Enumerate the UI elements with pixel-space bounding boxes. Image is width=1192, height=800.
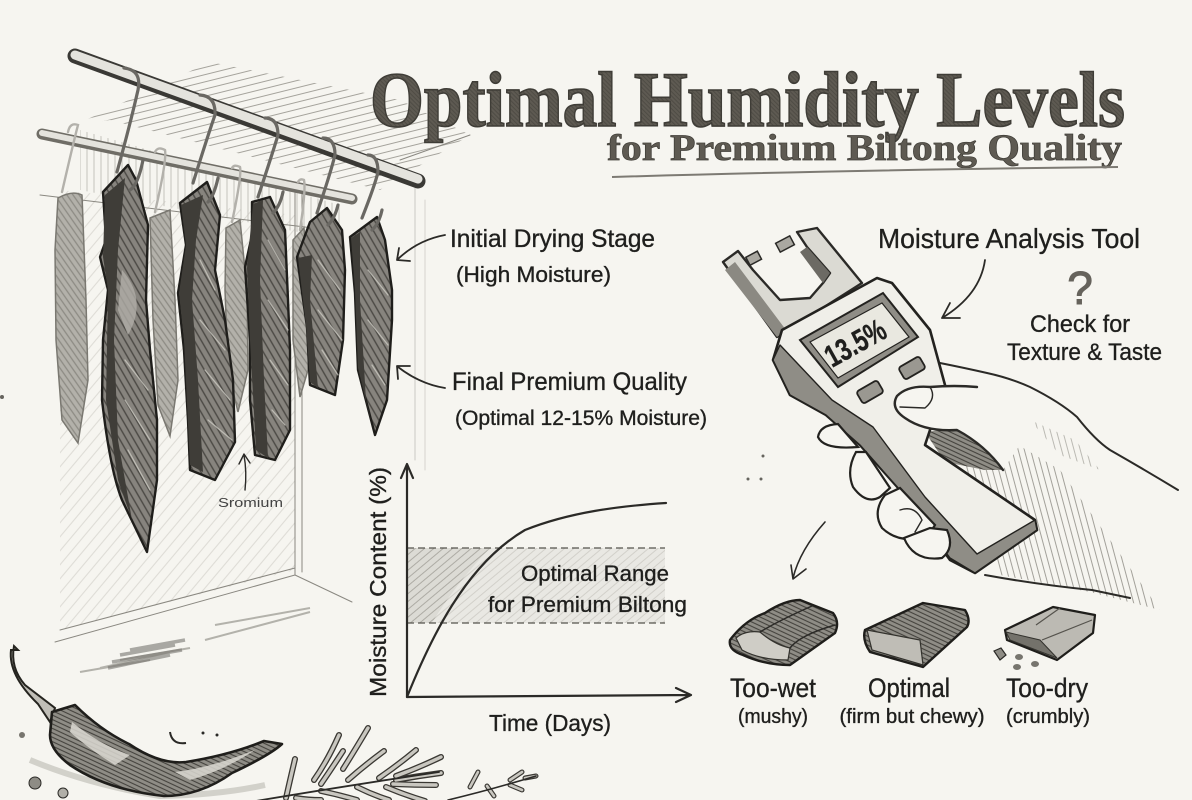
label: initial drying stage [450, 225, 655, 287]
ring fingernail [900, 509, 922, 532]
back rod [42, 133, 352, 199]
chart: moisture content over time [365, 464, 691, 736]
hand outline [940, 363, 1178, 490]
label: initial drying stage: Initial Drying Stage [450, 225, 655, 253]
sample: too wet [730, 600, 837, 728]
label: final premium quality: Final Premium Quality [452, 368, 687, 396]
arrow: to initial drying strip [397, 235, 445, 261]
reading: 13.5% [818, 312, 892, 374]
sample: optimal: (firm but chewy) [840, 706, 984, 728]
label: sromium: Sromium [218, 495, 283, 510]
optimal band [407, 548, 490, 623]
hanging biltong strips with hooks [100, 68, 392, 552]
label: moisture analysis tool: Moisture Analysis Tool [878, 223, 1140, 254]
label: check for texture and taste [1007, 311, 1162, 366]
chili pepper [11, 646, 282, 798]
back rod and background hanging strips [42, 124, 352, 443]
little finger [904, 528, 950, 559]
screen [800, 293, 918, 387]
background strip 3 [225, 166, 248, 412]
x axis label: Time (Days) [489, 710, 611, 736]
sample: too dry: (crumbly) [1006, 706, 1090, 728]
subtitle: for Premium Biltong Quality [607, 128, 1123, 169]
band label: for Premium Biltong [488, 592, 687, 617]
meter buttons [856, 356, 926, 404]
biltong strip 2 [178, 95, 235, 480]
band label: Optimal Range [521, 561, 669, 586]
biltong strip 1 [100, 68, 157, 552]
meter side band [773, 345, 1037, 573]
meter body [773, 278, 1037, 573]
ring finger [878, 488, 935, 539]
label: initial drying stage: (High Moisture) [456, 262, 611, 287]
biltong strip 5 [350, 155, 392, 435]
thumb [895, 384, 1040, 470]
rosemary sprig [250, 728, 441, 800]
background strip 4 [293, 179, 310, 397]
axes [401, 464, 691, 702]
biltong strip 3 [245, 118, 290, 460]
paper specks [0, 395, 764, 480]
room background sketch [40, 62, 470, 672]
background strip 2 [150, 148, 178, 436]
y axis label: Moisture Content (%) [365, 467, 391, 697]
sample: too wet: Too-wet [730, 673, 816, 703]
arrow: to sromium [239, 454, 250, 490]
hand shading [960, 440, 1160, 610]
front rod [75, 55, 418, 181]
moisture analysis tool in hand [723, 228, 1178, 610]
label: check for texture and taste: Texture & Taste [1007, 339, 1162, 366]
question mark: ? [1067, 262, 1093, 314]
sensor pins [746, 236, 794, 265]
middle finger [850, 452, 890, 499]
sample: too dry: Too-dry [1006, 673, 1088, 703]
biltong strip 4 [297, 138, 345, 395]
clamp jaws [723, 228, 862, 337]
label: check for texture and taste: Check for [1030, 311, 1130, 338]
index finger [818, 424, 858, 448]
sample: too dry [994, 607, 1095, 728]
fingers [818, 424, 950, 559]
sample: optimal [840, 603, 984, 728]
small herb sprig [448, 772, 536, 800]
moisture curve [407, 503, 666, 697]
subtitle underline [612, 167, 1118, 177]
arrow: to meter [942, 260, 985, 318]
label: final premium quality [452, 368, 707, 430]
sample: too wet: (mushy) [738, 706, 808, 728]
background strip 1 [55, 124, 88, 443]
arrow: to final quality strip [397, 366, 445, 388]
band label [488, 561, 687, 617]
label: final premium quality: (Optimal 12-15% Moisture) [455, 407, 707, 430]
sample: optimal: Optimal [868, 673, 950, 703]
arrow: to samples [791, 522, 825, 579]
